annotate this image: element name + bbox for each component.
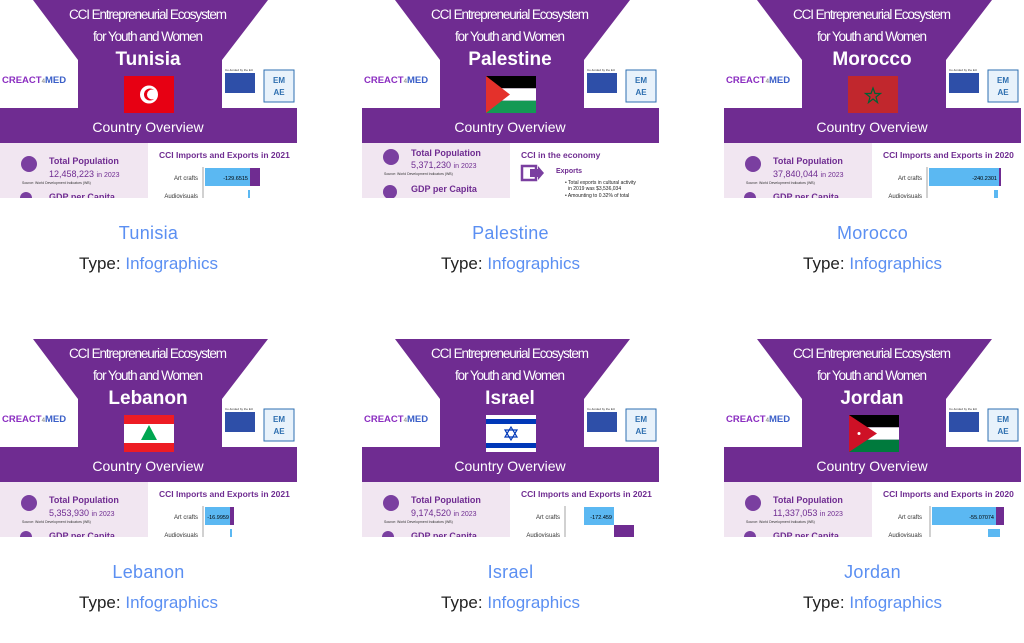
card: Palestine: Total Population bbox=[411, 148, 481, 158]
card: Israel: Co-funded by the EU bbox=[587, 407, 615, 411]
card: Palestine: Exports bbox=[556, 168, 582, 175]
card: Tunisia: Country Overview bbox=[92, 119, 205, 135]
card: Israel bbox=[362, 339, 659, 537]
label: Tunisia: Tunisia bbox=[119, 223, 178, 243]
card: Lebanon: CCI Entrepreneurial Ecosystem bbox=[69, 346, 227, 361]
card: Lebanon: CREACT4MED bbox=[2, 414, 66, 425]
card: Morocco: Total Population bbox=[773, 156, 843, 166]
card: Tunisia: Co-funded by the EU bbox=[225, 68, 253, 72]
card: Israel: Source: World Development Indicators (WB) bbox=[384, 520, 453, 524]
card: Tunisia: Source: World Development Indicators (WB) bbox=[22, 181, 91, 185]
card: Lebanon: Lebanon bbox=[108, 388, 188, 409]
card: Lebanon: Country Overview bbox=[92, 458, 205, 474]
card: Palestine: CCI Entrepreneurial Ecosystem bbox=[431, 7, 589, 22]
card: Palestine: for Youth and Women bbox=[455, 29, 565, 44]
card: Israel: CREACT4MED bbox=[364, 414, 428, 425]
card: Lebanon: Art crafts bbox=[174, 515, 198, 521]
card: Lebanon: AE bbox=[273, 427, 285, 436]
card: Israel: 9,174,520 in 2023 bbox=[411, 508, 477, 518]
card: Tunisia: Tunisia bbox=[115, 49, 181, 70]
card: Israel: Total Population bbox=[411, 495, 481, 505]
card: Palestine: 5,371,230 in 2023 bbox=[411, 160, 477, 170]
card: Lebanon: -16.9959 bbox=[207, 515, 229, 521]
card: Lebanon: Source: World Development Indicators (WB) bbox=[22, 520, 91, 524]
card: Morocco: -240.2301 bbox=[972, 176, 997, 182]
card: Morocco: Source: World Development Indicators (WB) bbox=[746, 181, 815, 185]
card: Morocco: Country Overview bbox=[816, 119, 929, 135]
card: Lebanon: 5,353,930 in 2023 bbox=[49, 508, 115, 518]
card: Tunisia: EM bbox=[273, 76, 285, 85]
card: Israel: -172.459 bbox=[590, 515, 612, 521]
card: Morocco: CCI Imports and Exports in 2020 bbox=[883, 150, 1014, 160]
card: Tunisia: AE bbox=[273, 88, 285, 97]
card: Lebanon bbox=[0, 339, 297, 537]
type: Israel: Type: Infographics bbox=[441, 593, 580, 612]
card: Morocco: CCI Entrepreneurial Ecosystem bbox=[793, 7, 951, 22]
card: Palestine: in 2019 was $3,536,034 bbox=[568, 186, 621, 192]
card: Tunisia: -129.6515 bbox=[223, 176, 248, 182]
card: Jordan: CREACT4MED bbox=[726, 414, 790, 425]
label: Morocco: Morocco bbox=[837, 223, 908, 243]
card: Jordan: EM bbox=[997, 415, 1009, 424]
card: Morocco: AE bbox=[997, 88, 1009, 97]
card: Jordan bbox=[724, 339, 1021, 537]
card: Jordan: Jordan bbox=[840, 388, 904, 409]
card: Palestine: GDP per Capita bbox=[411, 184, 478, 194]
card: Tunisia: CCI Imports and Exports in 2021 bbox=[159, 150, 290, 160]
card: Morocco: Art crafts bbox=[898, 176, 922, 182]
card: Morocco: Co-funded by the EU bbox=[949, 68, 977, 72]
card: Israel: AE bbox=[635, 427, 647, 436]
card: Lebanon: EM bbox=[273, 415, 285, 424]
label: Israel: Israel bbox=[488, 562, 533, 582]
card: Tunisia: 12,458,223 in 2023 bbox=[49, 169, 120, 179]
card: Jordan: Source: World Development Indicators (WB) bbox=[746, 520, 815, 524]
label: Palestine: Palestine bbox=[472, 223, 549, 243]
card: Israel: Art crafts bbox=[536, 515, 560, 521]
card: Tunisia: CCI Entrepreneurial Ecosystem bbox=[69, 7, 227, 22]
card: Morocco bbox=[724, 0, 1021, 198]
card: Tunisia bbox=[0, 0, 297, 198]
card: Jordan: -55.07074 bbox=[969, 515, 994, 521]
card: Morocco: CREACT4MED bbox=[726, 75, 790, 86]
card: Palestine: Palestine bbox=[468, 49, 552, 70]
card: Palestine: • Total exports in cultural activity bbox=[565, 180, 636, 186]
card: Palestine: Source: World Development Indicators (WB) bbox=[384, 172, 453, 176]
card: Israel: CCI Entrepreneurial Ecosystem bbox=[431, 346, 589, 361]
card: Palestine: EM bbox=[635, 76, 647, 85]
card: Israel: EM bbox=[635, 415, 647, 424]
label: Lebanon: Lebanon bbox=[112, 562, 185, 582]
card: Lebanon: Total Population bbox=[49, 495, 119, 505]
card: Jordan: 11,337,053 in 2023 bbox=[773, 508, 843, 518]
card: Jordan: Country Overview bbox=[816, 458, 929, 474]
card: Jordan: Total Population bbox=[773, 495, 843, 505]
card: Tunisia: for Youth and Women bbox=[93, 29, 203, 44]
card: Morocco: Morocco bbox=[832, 49, 912, 70]
card: Israel: for Youth and Women bbox=[455, 368, 565, 383]
card: Palestine: Co-funded by the EU bbox=[587, 68, 615, 72]
card: Morocco: EM bbox=[997, 76, 1009, 85]
card: Morocco: for Youth and Women bbox=[817, 29, 927, 44]
card: Israel: CCI Imports and Exports in 2021 bbox=[521, 489, 652, 499]
card: Morocco: 37,840,044 in 2023 bbox=[773, 169, 844, 179]
card: Jordan: for Youth and Women bbox=[817, 368, 927, 383]
card: Palestine: Country Overview bbox=[454, 119, 567, 135]
card: Jordan: Art crafts bbox=[898, 515, 922, 521]
label: Jordan: Jordan bbox=[844, 562, 901, 582]
card: Tunisia: Art crafts bbox=[174, 176, 198, 182]
card: Lebanon: CCI Imports and Exports in 2021 bbox=[159, 489, 290, 499]
card: Jordan: CCI Imports and Exports in 2020 bbox=[883, 489, 1014, 499]
card: Lebanon: Co-funded by the EU bbox=[225, 407, 253, 411]
card: Lebanon: for Youth and Women bbox=[93, 368, 203, 383]
type: Palestine: Type: Infographics bbox=[441, 254, 580, 273]
card: Jordan: AE bbox=[997, 427, 1009, 436]
type: Tunisia: Type: Infographics bbox=[79, 254, 218, 273]
type: Lebanon: Type: Infographics bbox=[79, 593, 218, 612]
card: Tunisia: Total Population bbox=[49, 156, 119, 166]
card: Palestine: CREACT4MED bbox=[364, 75, 428, 86]
card: Israel: Israel bbox=[485, 388, 535, 409]
card: Jordan: CCI Entrepreneurial Ecosystem bbox=[793, 346, 951, 361]
card: Israel: Country Overview bbox=[454, 458, 567, 474]
type: Morocco: Type: Infographics bbox=[803, 254, 942, 273]
type: Jordan: Type: Infographics bbox=[803, 593, 942, 612]
card: Tunisia: CREACT4MED bbox=[2, 75, 66, 86]
card: Jordan: Co-funded by the EU bbox=[949, 407, 977, 411]
card: Palestine bbox=[362, 0, 659, 198]
card: Palestine: AE bbox=[635, 88, 647, 97]
card: Palestine: CCI in the economy bbox=[521, 150, 601, 160]
